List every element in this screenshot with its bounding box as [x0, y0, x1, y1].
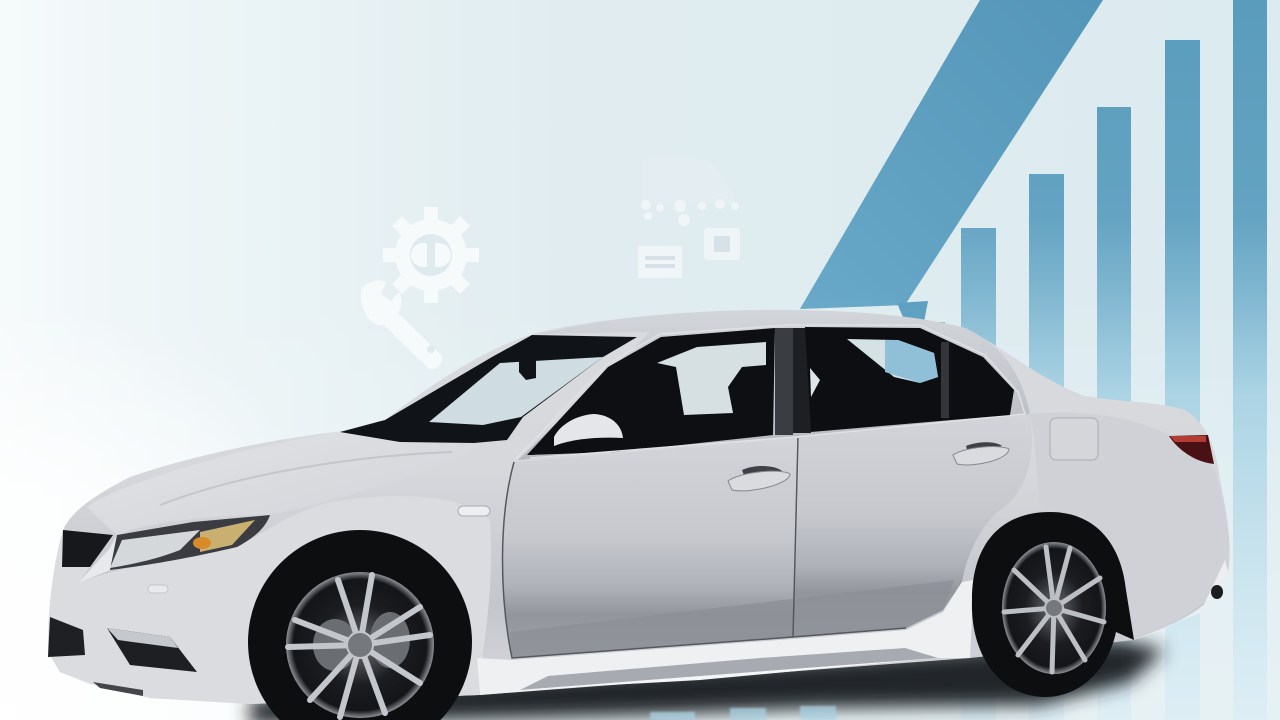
car: headlight: [78, 515, 270, 583]
car: roof rail: [518, 310, 1030, 460]
car: left intake: [48, 617, 85, 657]
icon: gear and wrench: [361, 207, 479, 369]
car: front fender and bumper: [48, 496, 491, 704]
chart: rising bars: [961, 0, 1267, 720]
car: front door: [502, 438, 798, 658]
car: side mirror: [527, 414, 623, 455]
car: B pillar: [775, 328, 811, 435]
wheel: front: [248, 530, 472, 720]
car: hood crease: [160, 452, 452, 505]
car: door shadow band: [510, 580, 954, 658]
icon: faded parts diagram: [638, 154, 740, 278]
blue reflections under car: [650, 706, 836, 720]
car: grille: [62, 530, 113, 567]
car: tail light: [1169, 435, 1214, 464]
car: front window: [527, 328, 775, 455]
arrow: diagonal growth band: [800, 0, 1103, 390]
shadow: ground under car: [250, 640, 1165, 720]
car: door handles: [728, 442, 1009, 491]
car body: [48, 310, 1230, 704]
car: lower sill: [477, 580, 974, 695]
car: rear quarter panel: [1030, 413, 1229, 640]
car: exhaust: [1211, 585, 1223, 599]
car: side marker: [458, 506, 490, 516]
car: bumper slit: [93, 682, 143, 696]
car: door seam lines: [502, 438, 906, 658]
car: silver sedan side view: [48, 310, 1230, 720]
wheel: rear: [972, 512, 1134, 697]
car: fuel door: [1050, 418, 1098, 460]
car: window trim: [515, 325, 1025, 460]
car: rear door: [793, 414, 1032, 637]
car: rear window: [805, 327, 1014, 432]
car: lower intake: [107, 628, 197, 672]
car: hood: [87, 431, 472, 535]
car: windshield: [340, 335, 637, 443]
